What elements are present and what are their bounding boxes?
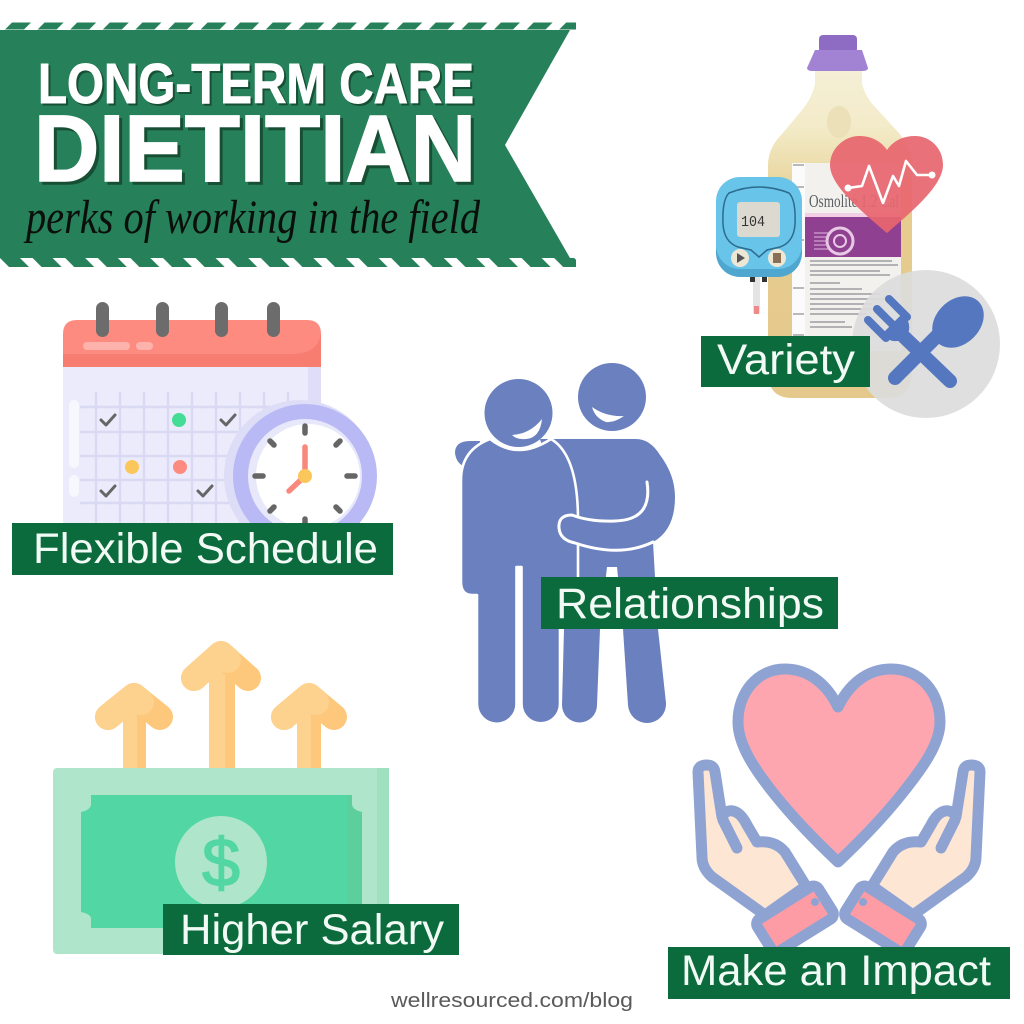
panel: higher salary (53, 654, 459, 955)
banknote (53, 768, 389, 954)
center arrow (194, 654, 248, 769)
left hand (698, 765, 836, 954)
label: make an impact: Make an Impact (681, 947, 991, 995)
title banner (0, 22, 576, 267)
left arrow (108, 696, 160, 769)
hugging arm (559, 480, 655, 550)
title line: dietitian: DIETITIAN (34, 96, 476, 202)
panel: make an impact (668, 669, 1010, 999)
panel: flexible schedule (12, 302, 393, 575)
label: higher salary: Higher Salary (180, 906, 445, 954)
title line: long-term care: LONG-TERM CARE (38, 52, 474, 116)
panel: relationships (455, 363, 838, 724)
heads (484, 379, 552, 447)
panel: variety (701, 35, 1000, 418)
clock icon (224, 400, 377, 552)
heart (738, 669, 940, 862)
feeding formula bottle: Osmolite 1.2 Cal (809, 191, 899, 211)
label: variety: Variety (717, 336, 856, 384)
right figure (455, 439, 675, 723)
subtitle: perks of working in the field (23, 191, 481, 244)
label: flexible schedule: Flexible Schedule (33, 525, 378, 573)
feeding formula bottle (768, 35, 912, 398)
footer url: wellresourced.com/blog (390, 990, 633, 1012)
calendar icon (63, 302, 321, 525)
two people hugging icon (455, 363, 675, 724)
heart with pulse (830, 136, 943, 233)
fork and spoon circle (852, 270, 1000, 418)
right hand (842, 765, 980, 954)
left figure (461, 439, 578, 724)
glucose meter (716, 177, 802, 314)
three up arrows (108, 654, 334, 769)
banknote: $ (202, 825, 240, 901)
glucose meter: 104 (741, 214, 765, 231)
label: relationships: Relationships (556, 580, 824, 628)
right arrow (284, 696, 334, 769)
